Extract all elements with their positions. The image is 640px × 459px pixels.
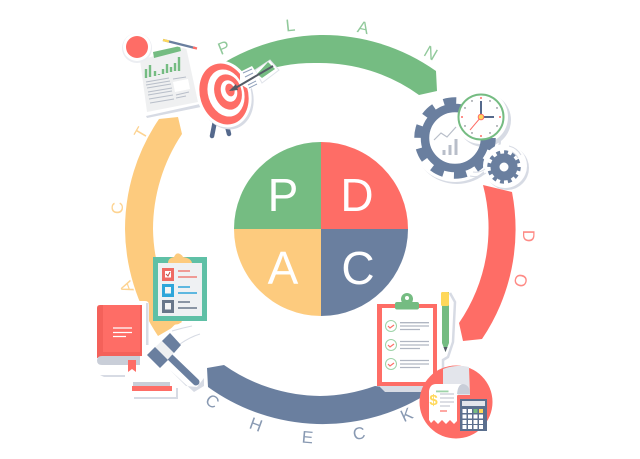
clipboard shadow	[377, 384, 437, 392]
item lines	[400, 323, 429, 368]
label: PLAN: P	[215, 37, 233, 59]
clock hands	[481, 101, 494, 117]
arc: act	[125, 117, 182, 336]
arc: do	[459, 185, 516, 341]
target legs	[212, 116, 230, 137]
label: CHECK	[202, 390, 416, 447]
label: ACT: A	[116, 278, 138, 295]
report bars	[146, 57, 179, 78]
receipt roll strip	[443, 366, 470, 395]
receipt header	[436, 390, 448, 392]
icon: gavel	[147, 325, 204, 392]
pie chart	[234, 142, 408, 316]
grey checkbox	[162, 300, 174, 313]
trend chart	[434, 127, 456, 140]
clock ticks	[461, 97, 501, 137]
pencil	[162, 39, 197, 48]
gear sticker	[413, 96, 501, 184]
clock	[458, 94, 504, 140]
pie letters: C	[341, 242, 375, 294]
receipt roll end	[457, 384, 470, 394]
book title lines	[113, 328, 132, 336]
label: ACT: C	[108, 202, 127, 214]
book sticker	[93, 301, 149, 375]
book cover	[97, 305, 142, 358]
receipt lines	[440, 394, 454, 406]
arrow shaft	[232, 66, 273, 90]
large gear	[425, 108, 485, 168]
label: ACT: T	[130, 124, 152, 142]
arc: plan	[225, 35, 437, 95]
gavel handle	[170, 357, 196, 382]
clipboard clip	[168, 253, 192, 263]
icon: checklist clipboard	[377, 293, 437, 392]
calculator	[460, 399, 487, 431]
book pages	[97, 356, 140, 365]
target sticker	[190, 56, 262, 136]
report image box	[173, 79, 190, 92]
label: CHECK: H	[247, 414, 265, 436]
report text lines	[146, 77, 189, 103]
label: PLAN	[215, 16, 441, 65]
check items	[386, 320, 396, 370]
target rings	[192, 57, 256, 131]
small gear sticker	[485, 146, 529, 190]
label: CHECK: K	[398, 404, 416, 426]
calculator keys	[462, 409, 483, 429]
calculator display	[462, 401, 485, 406]
label: PLAN: N	[421, 42, 441, 65]
label: DO	[509, 230, 538, 289]
label: CHECK: C	[202, 390, 223, 413]
label: PLAN: A	[356, 17, 371, 38]
segment D	[321, 142, 408, 229]
blue checkbox	[162, 284, 174, 297]
segment A	[234, 229, 321, 316]
label: ACT	[108, 124, 152, 295]
motion lines	[240, 66, 260, 90]
report page	[140, 47, 198, 112]
clipboard board	[377, 304, 437, 386]
gavel sticker	[147, 325, 201, 388]
icon: receipt and calculator	[420, 366, 492, 438]
icon: gavel base	[129, 378, 178, 399]
segment P	[234, 142, 321, 229]
pie letters: D	[340, 169, 374, 221]
icon: action clipboard	[153, 253, 207, 321]
label: DO: O	[509, 272, 531, 289]
receipt paper	[429, 384, 463, 424]
report sticker	[134, 44, 202, 116]
pie letters	[268, 169, 375, 294]
report header	[153, 46, 181, 58]
label: CHECK: C	[351, 423, 367, 444]
pie letters: A	[268, 242, 299, 294]
red circle	[420, 366, 492, 438]
bookmark	[128, 360, 136, 372]
red circle badge	[122, 33, 152, 63]
motion lines	[172, 326, 200, 344]
icon: target	[188, 54, 279, 137]
icon: pencil	[441, 292, 455, 368]
icon: report	[122, 33, 202, 118]
arrow fletching	[255, 60, 279, 83]
pie letters: P	[268, 169, 298, 221]
label: DO: D	[519, 230, 538, 242]
red checkbox	[162, 268, 174, 281]
segment C	[321, 229, 408, 316]
small gear	[495, 158, 513, 176]
gavel head	[147, 333, 181, 368]
icon: book	[93, 301, 149, 377]
label: PLAN: L	[285, 16, 296, 35]
arc: check	[207, 365, 430, 424]
dollar sign: $	[429, 392, 438, 409]
motion lines	[470, 146, 521, 177]
clipboard board	[153, 257, 207, 321]
label: CHECK: E	[301, 428, 314, 447]
icon: gear and clock	[411, 90, 529, 190]
clipboard clip	[395, 302, 419, 310]
